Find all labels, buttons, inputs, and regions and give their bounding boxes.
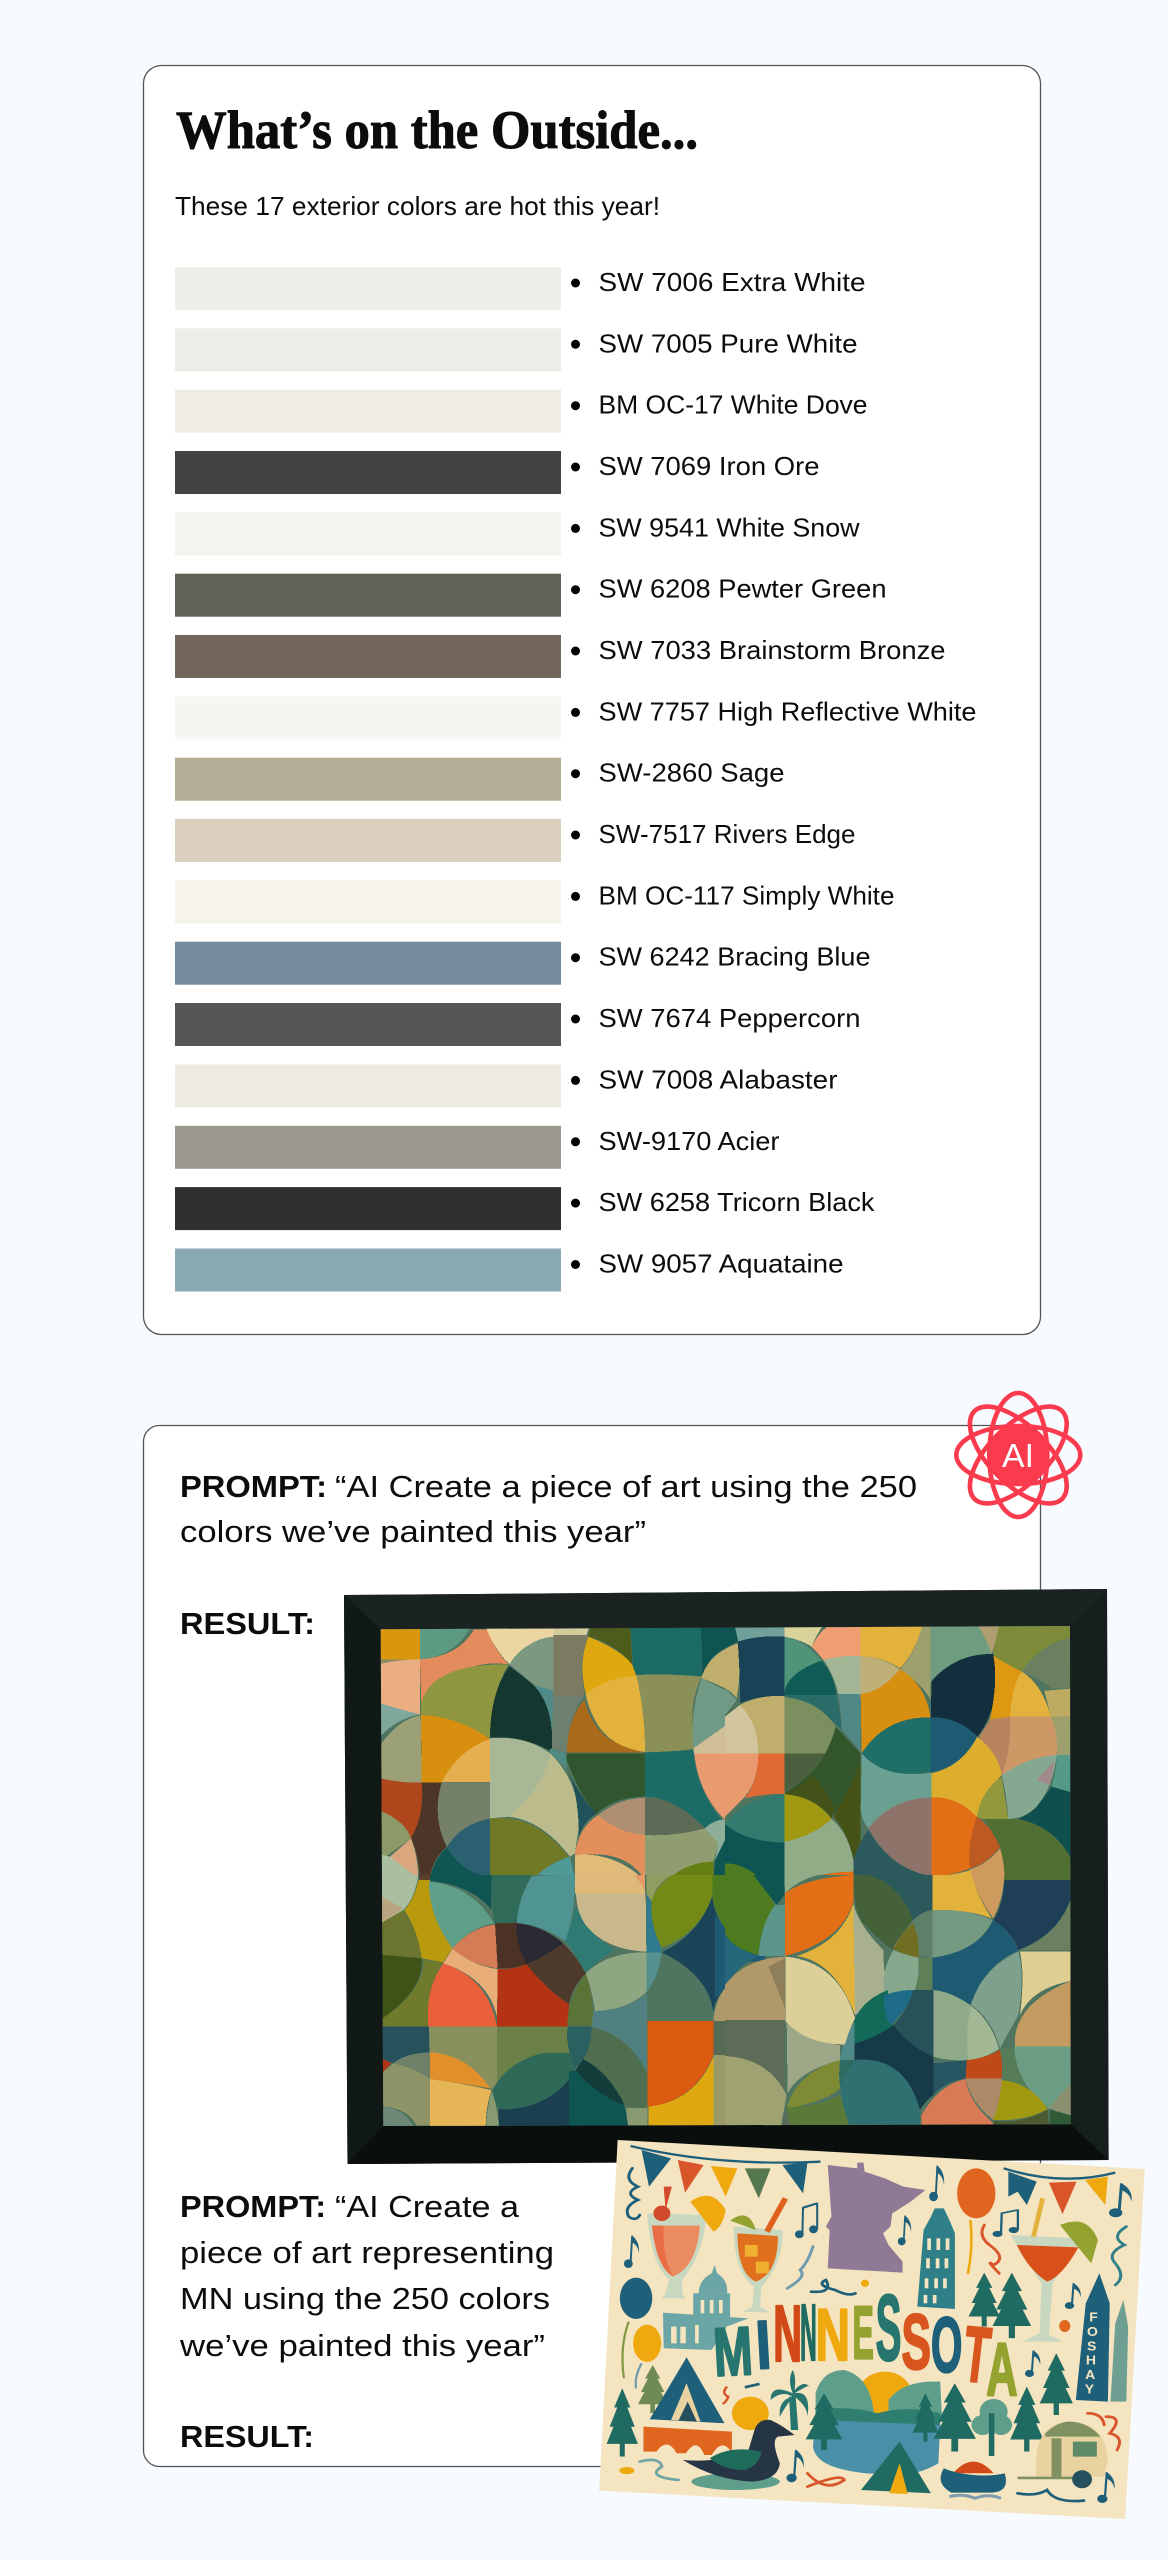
color row: Brainstorm Bronze: SW 7033 Brainstorm Bronze xyxy=(598,635,946,665)
color row: High Reflective White xyxy=(175,696,976,739)
large tent xyxy=(650,2357,725,2423)
prompt 2 text: “AI Create a xyxy=(335,2189,520,2224)
MINNESOTA lettering: E xyxy=(852,2290,874,2374)
color row: White Snow: SW 9541 White Snow xyxy=(598,512,860,542)
round tree xyxy=(972,2399,1012,2456)
capitol building xyxy=(663,2265,748,2350)
cocktail glass 2 xyxy=(730,2198,785,2313)
prompt 2 text: piece of art representing xyxy=(180,2235,554,2270)
color row: Brainstorm Bronze xyxy=(175,635,946,678)
Foshay tower: H xyxy=(1086,2353,1096,2367)
bridge xyxy=(643,2427,732,2455)
color row: White Dove: BM OC-17 White Dove xyxy=(598,390,868,420)
prompt 2 text: MN using the 250 colors xyxy=(180,2281,550,2316)
music notes xyxy=(624,2166,1132,2503)
color row: Simply White: BM OC-117 Simply White xyxy=(598,880,894,910)
camper xyxy=(1018,2422,1108,2488)
small tent xyxy=(861,2442,931,2494)
Foshay tower: A xyxy=(1085,2368,1096,2382)
color row: Alabaster: SW 7008 Alabaster xyxy=(598,1064,838,1094)
color row: Extra White: SW 7006 Extra White xyxy=(598,267,866,297)
Foshay tower: Y xyxy=(1085,2382,1094,2396)
MINNESOTA lettering: A xyxy=(986,2327,1018,2411)
color row: Extra White xyxy=(175,267,866,310)
prompt 1 text xyxy=(180,1469,917,1549)
MINNESOTA lettering xyxy=(711,2276,1018,2411)
color row: Simply White xyxy=(175,880,894,923)
artwork shapes xyxy=(375,1620,1075,2135)
Foshay tower: O xyxy=(1087,2325,1098,2339)
prompt 1 text: PROMPT: xyxy=(180,1469,327,1504)
heading: What’s on the Outside... xyxy=(176,100,698,160)
color row: Sage xyxy=(175,758,784,801)
trees xyxy=(607,2273,1073,2457)
MINNESOTA lettering: O xyxy=(931,2301,962,2389)
color row: Acier: SW-9170 Acier xyxy=(598,1126,780,1156)
MINNESOTA lettering: M xyxy=(711,2313,754,2391)
cocktail glass 1 xyxy=(647,2187,726,2298)
color row: Peppercorn: SW 7674 Peppercorn xyxy=(598,1003,860,1033)
color row: Tricorn Black xyxy=(175,1187,876,1230)
MINNESOTA lettering: I xyxy=(754,2307,773,2384)
color row: Pewter Green xyxy=(175,574,886,617)
panel: AI prompts xyxy=(144,1426,1040,2466)
confetti squiggles xyxy=(627,2168,1126,2501)
color row: Aquataine: SW 9057 Aquataine xyxy=(598,1248,844,1278)
color row: Bracing Blue xyxy=(175,942,870,985)
MINNESOTA lettering: N xyxy=(800,2288,817,2377)
result 2 label: RESULT: xyxy=(180,2419,314,2454)
color row: Rivers Edge: SW-7517 Rivers Edge xyxy=(598,819,856,849)
Minnesota postcard artwork xyxy=(599,2140,1145,2519)
panel: exterior colors xyxy=(144,66,1040,1334)
bunting right xyxy=(1004,2168,1115,2214)
prompt 2 text: PROMPT: xyxy=(180,2189,326,2224)
color row: Pure White: SW 7005 Pure White xyxy=(598,328,858,358)
intro text: These 17 exterior colors are hot this year! xyxy=(175,191,660,221)
lake scene xyxy=(813,2370,942,2474)
color row: Pure White xyxy=(175,328,858,371)
result 1 label: RESULT: xyxy=(180,1606,315,1641)
prompt 1 text: “AI Create a piece of art using the 250 xyxy=(335,1469,917,1504)
prompt 2 text xyxy=(179,2189,554,2363)
bunting left xyxy=(631,2146,820,2198)
prompt 2 text: we’ve painted this year” xyxy=(179,2328,545,2363)
color row: High Reflective White: SW 7757 High Reflective White xyxy=(598,696,976,726)
Foshay tower: F xyxy=(1089,2310,1098,2324)
balloons xyxy=(620,2168,995,2388)
palm tree xyxy=(771,2370,810,2430)
color row: Peppercorn xyxy=(175,1003,860,1046)
MINNESOTA lettering: N xyxy=(773,2289,802,2378)
MINNESOTA lettering: N xyxy=(816,2295,850,2376)
color row: Aquataine xyxy=(175,1248,844,1292)
icon: AI atom: AI xyxy=(1002,1437,1034,1474)
martini glass xyxy=(1010,2198,1098,2342)
color row: Iron Ore: SW 7069 Iron Ore xyxy=(598,451,820,481)
color row: Bracing Blue: SW 6242 Bracing Blue xyxy=(598,942,870,972)
tall building xyxy=(917,2208,955,2309)
Foshay tower xyxy=(1076,2273,1128,2402)
red hill over blue cloud xyxy=(941,2462,1006,2498)
color row: Iron Ore xyxy=(175,451,820,494)
sun disc and loon xyxy=(683,2397,795,2490)
MINNESOTA lettering: T xyxy=(959,2310,995,2400)
color row: Pewter Green: SW 6208 Pewter Green xyxy=(598,574,886,604)
Minnesota state shape xyxy=(826,2163,925,2273)
icon: AI atom xyxy=(954,1391,1083,1519)
Foshay tower: S xyxy=(1087,2339,1096,2353)
color row: White Dove xyxy=(175,390,868,433)
color row: Sage: SW-2860 Sage xyxy=(598,758,784,788)
color row: Alabaster xyxy=(175,1064,838,1107)
framed abstract artwork xyxy=(344,1589,1109,2164)
confetti dots xyxy=(619,2280,1070,2474)
color row: Rivers Edge xyxy=(175,819,856,862)
prompt 1 text: colors we’ve painted this year” xyxy=(180,1514,646,1549)
MINNESOTA lettering: S xyxy=(901,2298,931,2385)
color row: White Snow xyxy=(175,512,860,555)
MINNESOTA lettering: S xyxy=(876,2276,901,2380)
color row: Tricorn Black: SW 6258 Tricorn Black xyxy=(598,1187,876,1217)
color row: Acier xyxy=(175,1126,780,1169)
